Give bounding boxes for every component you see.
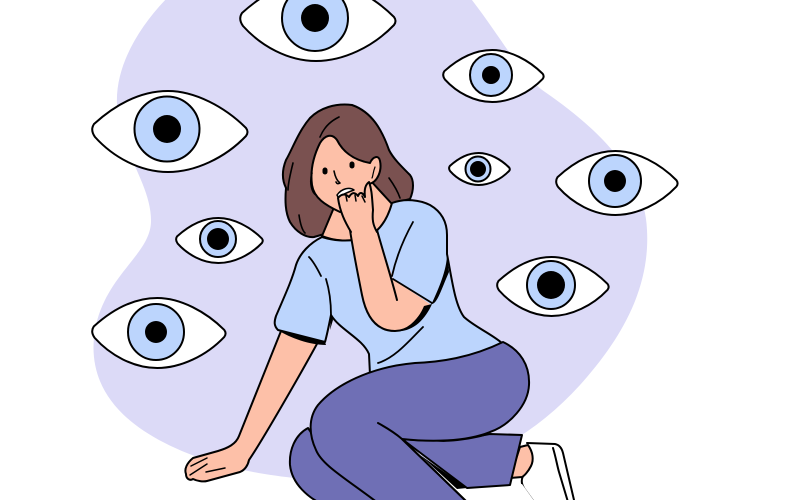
bent arm bbox=[340, 200, 430, 331]
eye: upper right bbox=[443, 50, 544, 102]
hand fingers bbox=[190, 458, 225, 475]
eye: lower right bbox=[497, 257, 609, 316]
ear detail bbox=[372, 167, 375, 178]
face bbox=[311, 136, 381, 212]
shirt sleeve shadow bbox=[278, 254, 449, 345]
far leg shadow bbox=[437, 434, 490, 442]
background blob bbox=[94, 0, 647, 481]
shirt bbox=[275, 200, 502, 375]
left arm bbox=[185, 331, 318, 481]
eyes and nose bbox=[325, 164, 352, 172]
eye: lower left bbox=[92, 298, 226, 368]
fold shadow wedge bbox=[420, 455, 467, 489]
woman bbox=[185, 105, 575, 500]
fist bbox=[338, 182, 377, 233]
back knee bbox=[290, 428, 380, 500]
arm shadow bbox=[395, 304, 432, 331]
shirt fold lines bbox=[309, 222, 432, 363]
eye: top bbox=[240, 0, 396, 61]
eye: middle left bbox=[176, 218, 263, 263]
pants inner fold bbox=[378, 423, 468, 500]
shoe bbox=[522, 443, 575, 500]
far leg bbox=[402, 434, 522, 488]
ankle bbox=[510, 445, 533, 478]
teeth bbox=[337, 188, 354, 197]
hair strands bbox=[288, 117, 400, 233]
neck bbox=[322, 180, 392, 241]
eye: small center bbox=[449, 153, 510, 185]
eye: right bbox=[556, 151, 678, 215]
eye: large left bbox=[92, 91, 247, 172]
pants thigh bbox=[311, 342, 529, 500]
white shoe sole bbox=[458, 484, 535, 500]
hair bbox=[283, 105, 413, 237]
